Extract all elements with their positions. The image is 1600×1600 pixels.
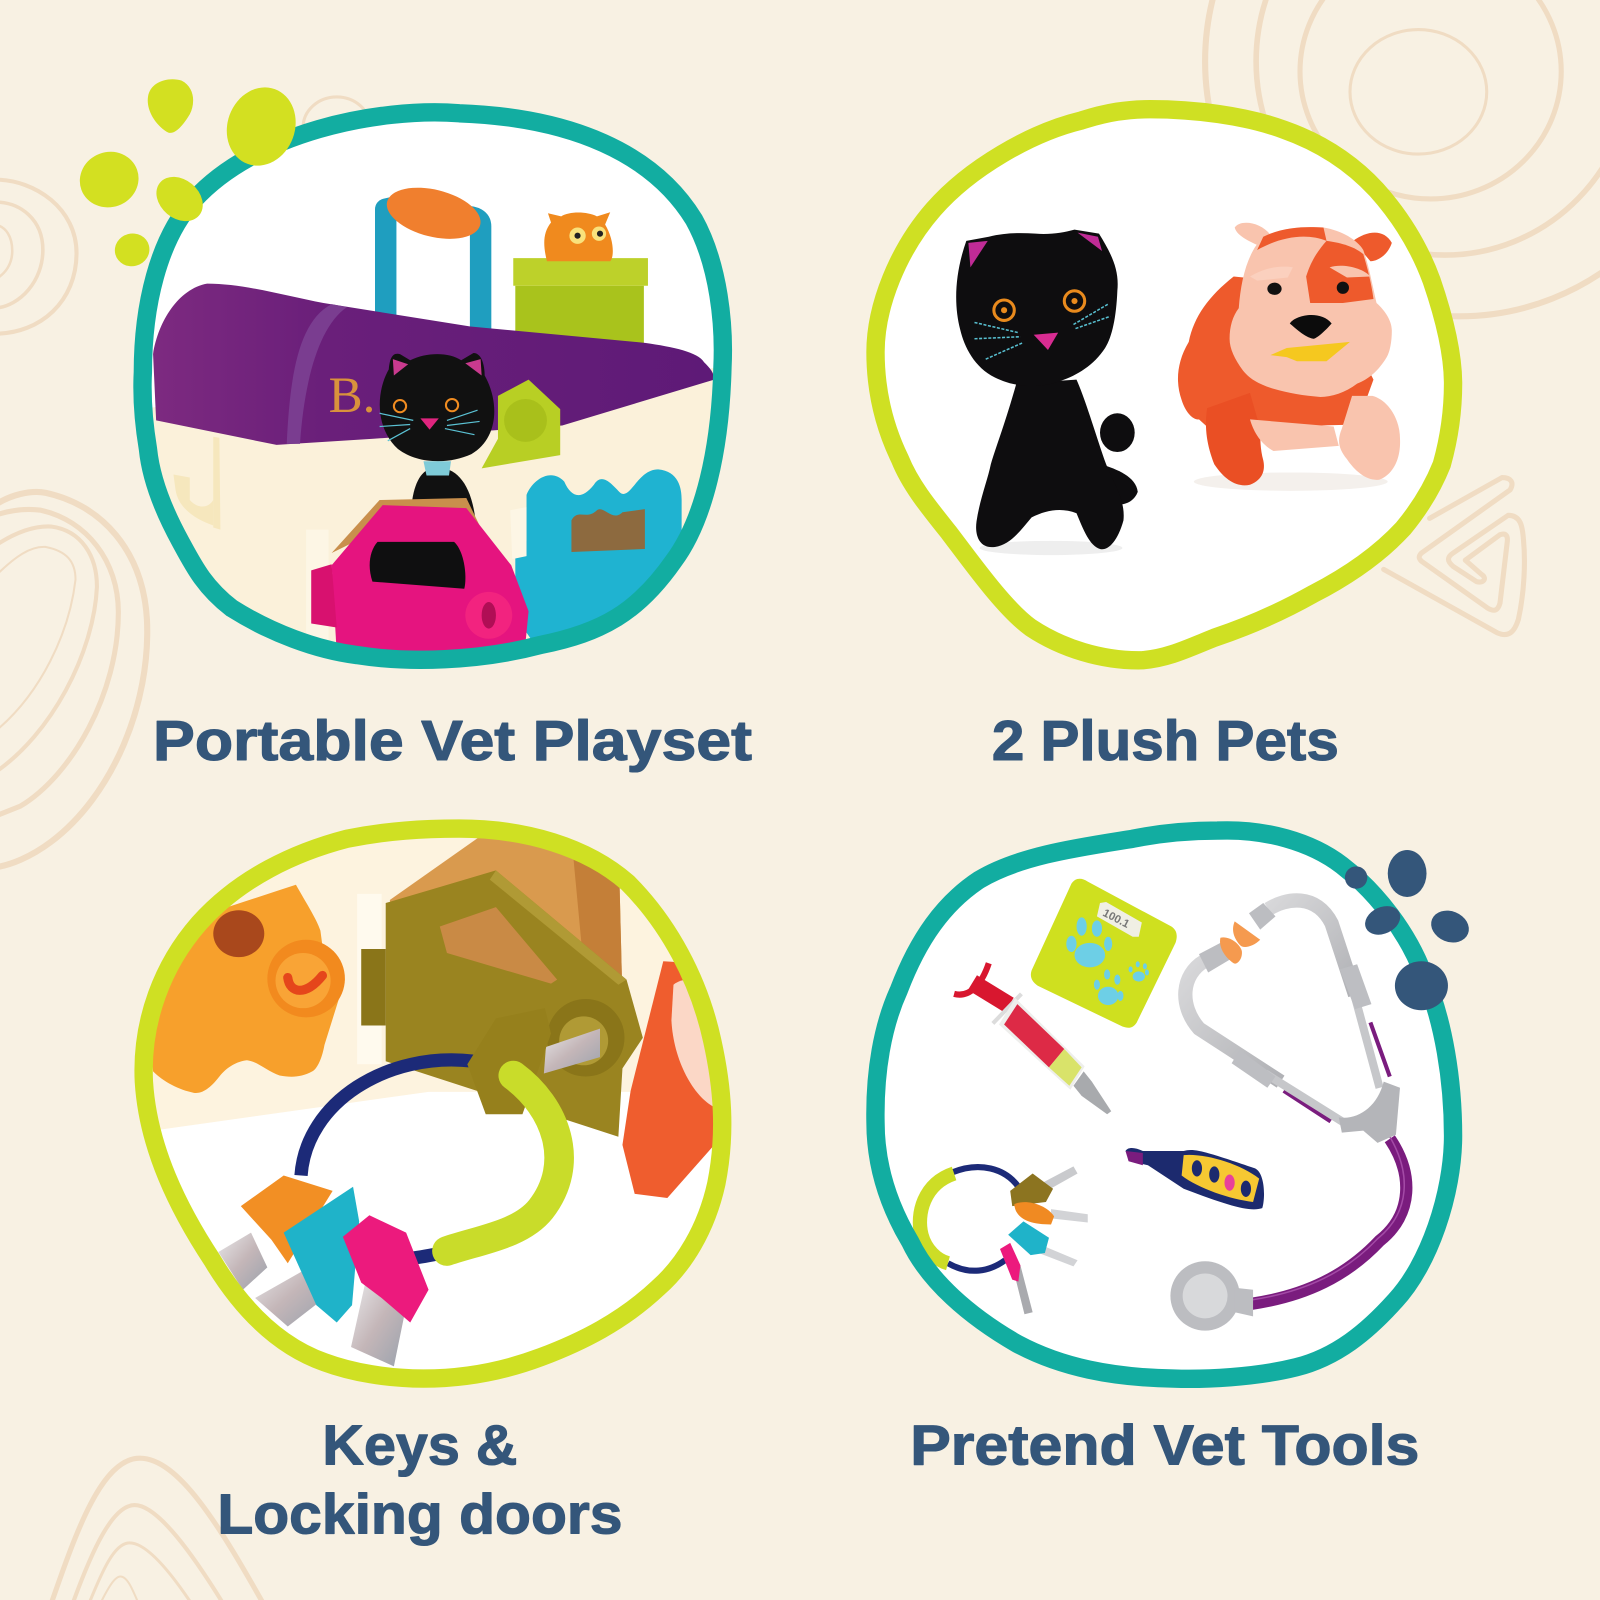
heading: portable vet playset: Portable Vet Playset [153,709,752,772]
blue door [515,469,682,653]
dog right leg [1339,396,1400,480]
icon: navy paw dots [1345,850,1474,1010]
dog ears [1235,223,1270,248]
dog head [1230,227,1392,397]
heading: keys and locking doors [217,1413,622,1546]
dog body base [1178,277,1373,429]
pink door window with plush [370,542,465,589]
couplers [1340,964,1371,1009]
chimney [515,286,644,343]
teal key [284,1187,359,1322]
plush dog arm [622,961,714,1198]
lime ring bar [447,1076,559,1251]
heading: keys and locking doors: Locking doors [217,1483,622,1546]
icon: lime paw dots [72,78,306,270]
navy ring [301,1060,473,1176]
handle grip [386,188,480,239]
pink door [332,505,529,653]
keyhole [465,592,512,639]
icon: scale: 100.1 [1101,907,1131,931]
panel: portable vet playset [143,112,724,673]
lime tag [482,380,560,468]
logo: B. [329,368,375,424]
heading: keys and locking doors: Keys & [322,1413,517,1476]
owl toy [544,212,613,261]
hinge post [357,894,382,1064]
cat head [380,353,494,476]
dog face patch [1306,241,1373,303]
chest piece [1170,1261,1240,1331]
panel: pretend vet tools [875,830,1453,1379]
cat body [412,470,475,516]
blue door window [571,509,645,552]
ring [144,829,722,1379]
orange door [143,885,345,1093]
orange door hole [213,910,264,957]
ring [143,112,723,660]
purple lid [153,284,714,445]
photo: lock and key close-up [133,837,714,1366]
icon: key ring [920,1166,1088,1314]
case body [152,368,714,642]
hinge posts [306,530,329,643]
icon: scale [1031,879,1177,1028]
ring [876,109,1453,660]
handle [386,204,481,332]
icon: syringe [954,963,1111,1114]
panel: 2 plush pets [876,109,1453,660]
ear caps [1249,903,1276,930]
orange bow [1233,921,1260,947]
photo: black plush cat [956,230,1138,555]
key stem [544,1029,600,1073]
photo: orange plush dog [1178,223,1400,491]
dog belly [1250,419,1339,451]
pink key [343,1215,429,1322]
heading: 2 plush pets: 2 Plush Pets [992,709,1339,772]
ring [875,830,1453,1379]
wall [133,837,673,1131]
silver keys [218,1233,267,1290]
hook [173,437,220,530]
dog front leg [1206,393,1264,485]
orange key [241,1176,333,1263]
heading: pretend vet tools: Pretend Vet Tools [910,1413,1419,1476]
olive door window [440,907,557,984]
olive door [386,870,643,1137]
lock cylinder [547,999,624,1077]
panel: keys and locking doors [133,829,722,1379]
orange lock [267,940,345,1017]
door opening [390,838,622,976]
icon: stethoscope [1170,900,1406,1331]
photo: vet case [143,179,724,673]
icon: thermometer [1126,1148,1264,1209]
junction [1339,1082,1400,1143]
olive key head [467,1026,551,1114]
